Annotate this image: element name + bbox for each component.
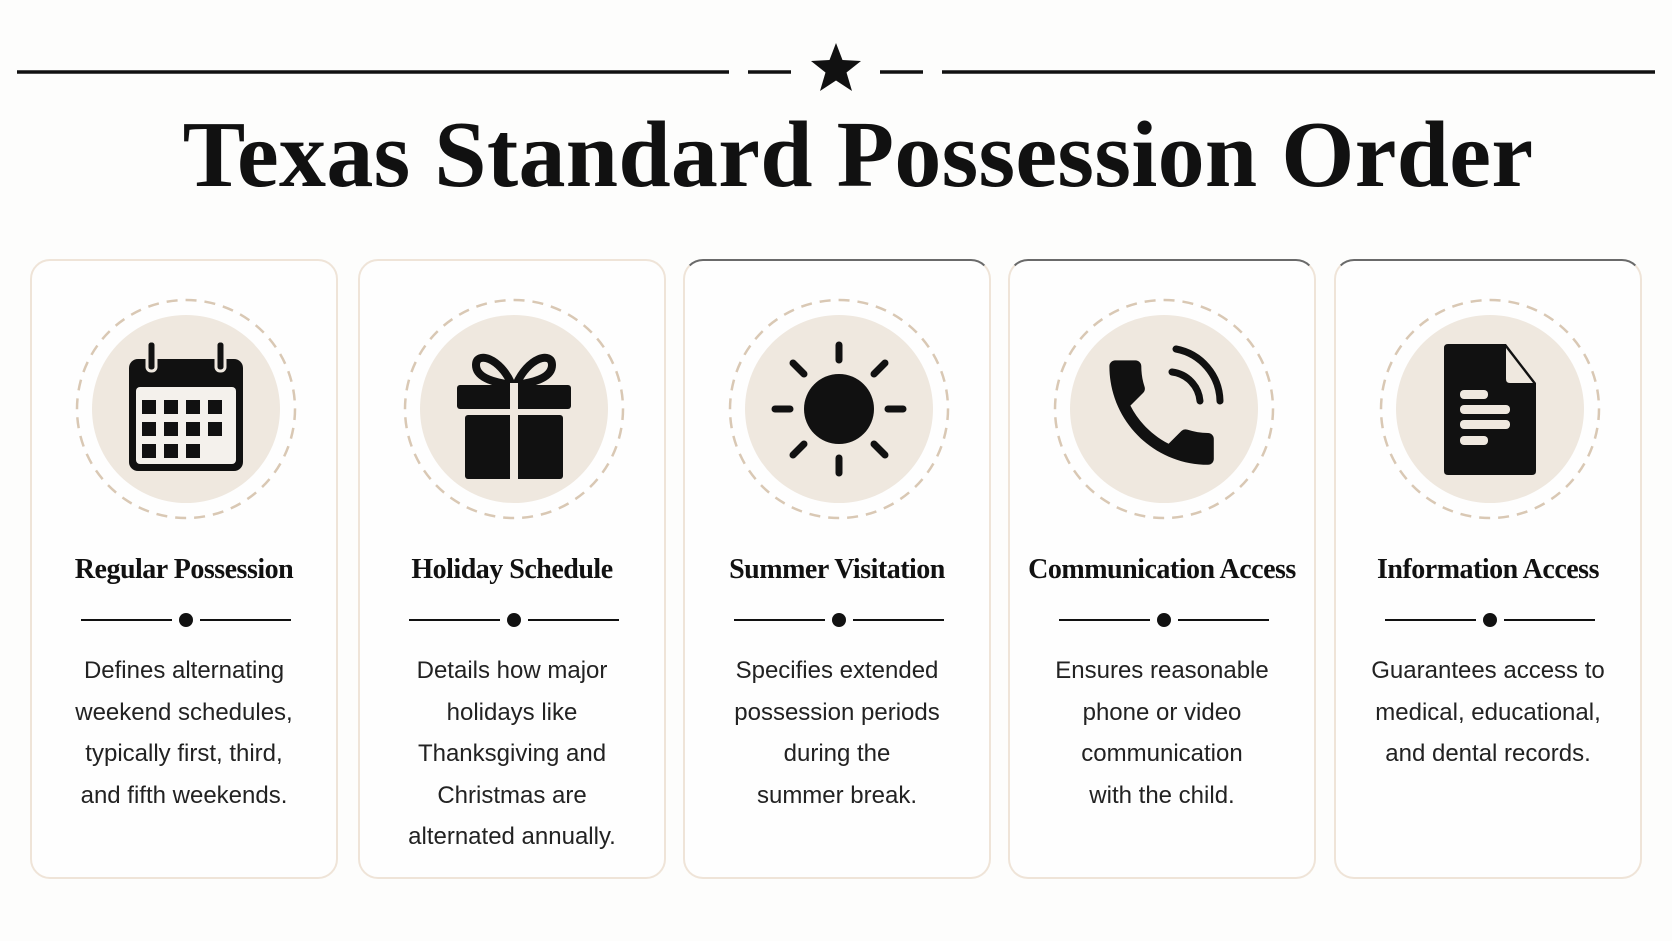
- icon: gift: [404, 298, 624, 627]
- panel: holiday schedule: [358, 259, 666, 879]
- heading: Communication Access: [1028, 554, 1296, 585]
- header ornament: [17, 43, 1655, 91]
- icon: calendar: [76, 298, 296, 627]
- heading: Holiday Schedule: [411, 554, 613, 585]
- panel: communication access: [1008, 259, 1316, 879]
- text: [734, 657, 940, 809]
- text: Christmas are: [437, 782, 587, 809]
- text: during the: [784, 740, 890, 767]
- text: with the child.: [1089, 782, 1235, 809]
- heading: Regular Possession: [75, 554, 293, 585]
- text: [75, 657, 293, 809]
- text: possession periods: [734, 699, 940, 726]
- text: [1055, 657, 1269, 809]
- text: medical, educational,: [1375, 699, 1601, 726]
- text: Details how major: [417, 657, 607, 684]
- text: summer break.: [757, 782, 917, 809]
- text: holidays like: [447, 699, 577, 726]
- panel: information access: [1334, 259, 1642, 879]
- text: and fifth weekends.: [81, 782, 287, 809]
- text: Ensures reasonable: [1055, 657, 1269, 684]
- title: Texas Standard Possession Order: [183, 103, 1533, 207]
- panel: regular possession: [30, 259, 338, 879]
- icon: document: [1380, 298, 1600, 627]
- text: weekend schedules,: [75, 699, 293, 726]
- text: communication: [1081, 740, 1243, 767]
- icon: phone: [1054, 298, 1274, 627]
- text: Specifies extended: [736, 657, 938, 684]
- text: Defines alternating: [84, 657, 284, 684]
- text: alternated annually.: [408, 823, 616, 850]
- text: [1371, 657, 1605, 767]
- text: Thanksgiving and: [418, 740, 606, 767]
- text: Guarantees access to: [1371, 657, 1605, 684]
- icon: sun: [728, 298, 950, 627]
- text: [408, 657, 616, 850]
- heading: Information Access: [1377, 554, 1599, 585]
- text: phone or video: [1083, 699, 1241, 726]
- panel: summer visitation: [683, 259, 991, 879]
- text: typically first, third,: [85, 740, 283, 767]
- text: and dental records.: [1385, 740, 1591, 767]
- heading: Summer Visitation: [729, 554, 945, 585]
